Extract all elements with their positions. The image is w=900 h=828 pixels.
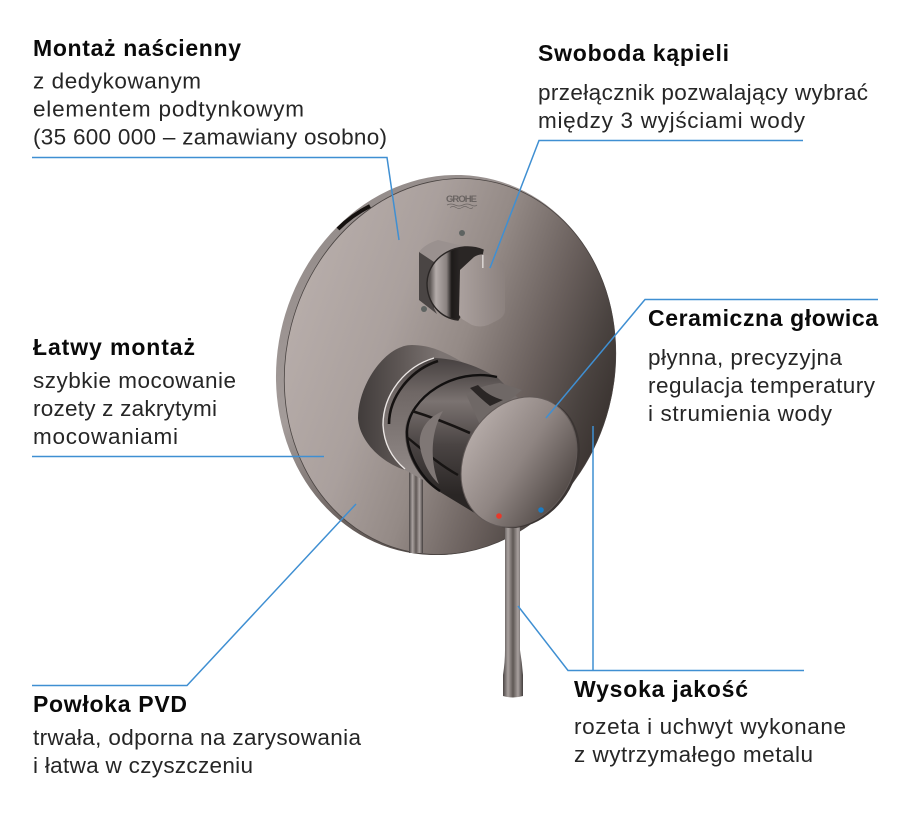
wall plate <box>235 138 657 592</box>
callout: Powłoka PVD: Powłoka PVD <box>33 691 187 717</box>
hot marker <box>496 513 502 519</box>
callout: Łatwy montaż: mocowaniami <box>33 424 178 449</box>
diverter switch <box>419 240 505 326</box>
callout: Montaż naścienny: z dedykowanym <box>33 68 201 94</box>
lever <box>503 522 523 698</box>
callout: Ceramiczna głowica: płynna, precyzyjna <box>648 345 842 370</box>
callout: Powłoka PVD: trwała, odporna na zarysowania <box>33 725 361 750</box>
callout: Powłoka PVD <box>32 504 361 778</box>
dark reflections <box>412 411 470 433</box>
callout: Ceramiczna głowica: i strumienia wody <box>648 401 833 426</box>
indicator dots <box>421 230 465 312</box>
callout: Wysoka jakość: z wytrzymałego metalu <box>574 742 813 767</box>
callout: Montaż naścienny: Montaż naścienny <box>33 35 241 61</box>
handle face <box>438 376 603 549</box>
middle band <box>383 358 500 492</box>
handle body <box>358 345 522 515</box>
callout: Montaż naścienny <box>32 35 399 240</box>
cold marker <box>538 507 544 513</box>
callout: Swoboda kąpieli: między 3 wyjściami wody <box>538 108 806 133</box>
crescent reflection <box>420 411 443 484</box>
callout: Powłoka PVD: i łatwa w czyszczeniu <box>33 753 253 778</box>
callout: Ceramiczna głowica: regulacja temperatury <box>648 373 876 398</box>
callout: Ceramiczna głowica: Ceramiczna głowica <box>648 305 878 331</box>
callout: Swoboda kąpieli: Swoboda kąpieli <box>538 40 729 66</box>
callout: Łatwy montaż: szybkie mocowanie <box>33 368 236 393</box>
callout: Montaż naścienny: elementem podtynkowym <box>33 96 304 122</box>
callout: Łatwy montaż: rozety z zakrytymi <box>33 396 217 421</box>
callout: Wysoka jakość <box>518 426 846 767</box>
callout: Montaż naścienny: (35 600 000 – zamawiany osobno) <box>33 124 387 150</box>
GROHE logo: GROHE <box>446 194 477 205</box>
callout: Swoboda kąpieli: przełącznik pozwalający wybrać <box>538 80 868 105</box>
faucet product image <box>235 138 657 698</box>
callout: Łatwy montaż: Łatwy montaż <box>33 334 195 360</box>
callout: Wysoka jakość: Wysoka jakość <box>574 676 748 702</box>
callout: Ceramiczna głowica <box>546 300 878 426</box>
callout: Łatwy montaż <box>32 334 324 456</box>
callout: Swoboda kąpieli <box>490 40 868 268</box>
front barrel <box>405 374 520 515</box>
rear rod reflection <box>409 466 423 553</box>
rear collar <box>358 345 462 470</box>
callout: Wysoka jakość: rozeta i uchwyt wykonane <box>574 714 846 739</box>
